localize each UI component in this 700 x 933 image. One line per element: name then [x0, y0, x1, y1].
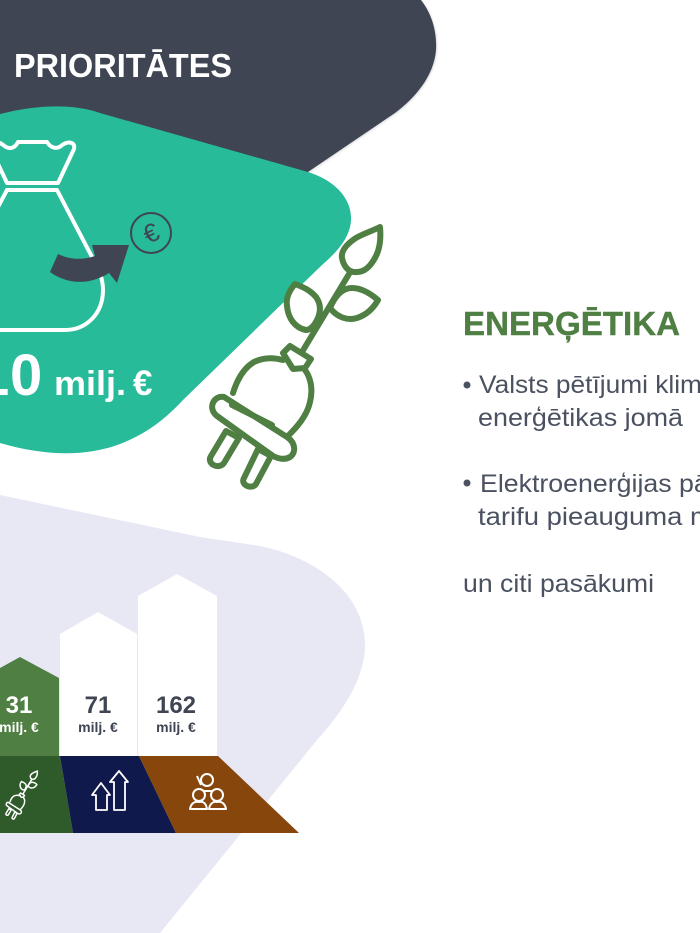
icon: euro coin: € [138, 216, 164, 250]
icon: rising arrows [92, 771, 128, 810]
text block: energy measures: enerģētikas jomā [478, 404, 683, 432]
icon: plug with leaves [210, 227, 380, 487]
bar: people 162: milj. € [156, 719, 196, 735]
total amount: milj. [54, 365, 126, 403]
icon: euro coin [131, 213, 171, 253]
panel: teal budget shape [0, 106, 351, 453]
icon: money bag [0, 142, 103, 330]
base: navy segment [60, 756, 176, 833]
heading: priorities: PRIORITĀTES [14, 47, 232, 84]
bar: people 162: 162 [156, 692, 196, 719]
icon: people group [190, 774, 226, 809]
bar: people 162 [138, 574, 217, 756]
bar: growth 71 [60, 612, 137, 756]
bar: energy 31 [0, 657, 59, 756]
bar: energy 31: 31 [6, 692, 32, 719]
text block: energy measures: un citi pasākumi [463, 570, 654, 598]
total amount [0, 343, 152, 408]
icon: curved arrow [50, 245, 129, 283]
bar: growth 71: 71 [85, 692, 111, 719]
total amount: € [133, 364, 152, 403]
base: brown segment [139, 756, 299, 833]
bar: growth 71: milj. € [78, 719, 118, 735]
bar: energy 31: milj. € [0, 719, 39, 735]
icon: small plug [6, 771, 37, 819]
heading: energy: ENERĢĒTIKA [463, 305, 680, 342]
panel: dark header shape [0, 0, 436, 174]
base: energy segment [0, 756, 73, 833]
panel: lavender chart background [0, 495, 365, 933]
bar chart [0, 574, 299, 833]
text block: energy measures [463, 371, 700, 598]
